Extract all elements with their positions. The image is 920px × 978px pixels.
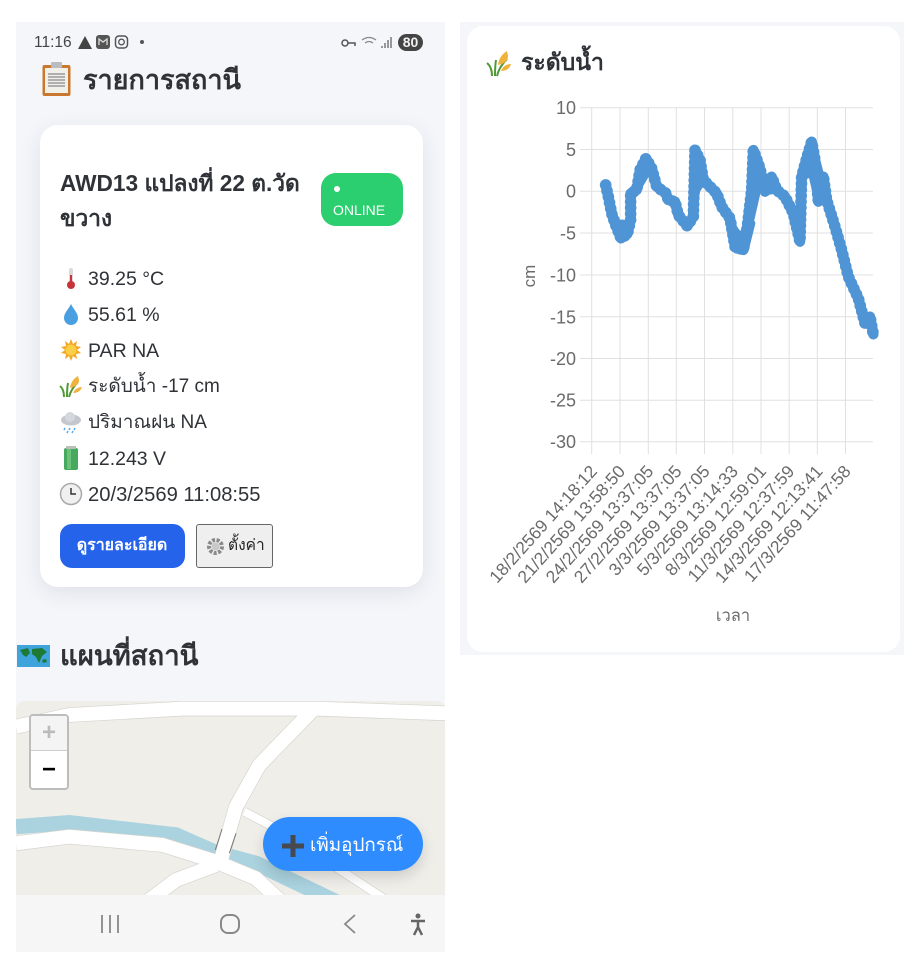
data series: [606, 142, 873, 334]
panel: phone screenshot: [16, 22, 445, 952]
y axis labels: 5: [566, 140, 576, 160]
settings label: ตั้งค่า: [228, 537, 265, 554]
button: details: ดูรายละเอียด: [77, 537, 167, 554]
reading: temperature: 39.25 °C: [88, 268, 164, 290]
badge dot: [334, 186, 340, 192]
add device button: [263, 817, 423, 871]
heading: water level: ระดับน้ำ: [521, 49, 604, 75]
x axis labels: 3/3/2569 13:37:05: [604, 461, 714, 580]
y axis labels: -30: [550, 432, 576, 452]
y axis labels: 10: [556, 98, 576, 118]
y axis labels: -25: [550, 390, 576, 410]
reading: PAR: PAR NA: [88, 340, 159, 362]
reading: water level: [60, 372, 220, 398]
line chart: [485, 98, 879, 625]
y axis labels: -15: [550, 308, 576, 328]
panel: station card: [40, 125, 423, 587]
x axis labels: 18/2/2569 14:18:12: [485, 461, 601, 587]
reading: timestamp: 20/3/2569 11:08:55: [88, 484, 260, 506]
status icons: [78, 34, 423, 51]
x axis labels: 5/3/2569 13:14:33: [633, 461, 742, 580]
status time: 11:16: [34, 34, 72, 51]
y axis labels: -5: [560, 224, 576, 244]
panel: water level chart: [460, 22, 904, 655]
x axis labels: 14/3/2569 12:13:41: [711, 461, 827, 587]
status badge: [321, 173, 403, 226]
y axis labels: [550, 98, 576, 452]
x axis labels: 11/3/2569 12:37:59: [683, 461, 798, 586]
icon: world map: [17, 645, 50, 667]
x axis labels: 27/2/2569 13:37:05: [570, 461, 686, 587]
icon: clipboard: [42, 62, 70, 96]
icon: plus: [282, 835, 304, 857]
map: [16, 701, 445, 895]
icon: rice: [486, 51, 511, 76]
y axis labels: -20: [550, 349, 576, 369]
heading: station map: แผนที่สถานี: [60, 640, 198, 671]
status bar: [34, 34, 423, 51]
navigation bar: [101, 914, 425, 936]
zoom in: [31, 716, 67, 751]
x axis labels: [485, 461, 855, 587]
y axis title: cm: [520, 265, 539, 287]
reading: voltage: 12.243 V: [88, 448, 166, 470]
x axis title: เวลา: [716, 607, 750, 625]
y axis labels: -10: [550, 266, 576, 286]
map zoom control: [29, 714, 69, 790]
station name: ขวาง: [60, 205, 112, 231]
reading: water level: ระดับน้ำ -17 cm: [88, 376, 220, 397]
x axis labels: 8/3/2569 12:59:01: [661, 461, 770, 580]
station name: AWD13 แปลงที่ 22 ต.วัด: [60, 170, 300, 196]
x axis labels: 21/2/2569 13:58:50: [513, 461, 629, 587]
reading: rainfall: ปริมาณฝน NA: [88, 412, 207, 433]
icon: gear: [207, 538, 224, 555]
x axis labels: 17/3/2569 11:47:58: [740, 461, 855, 586]
button: details: [60, 524, 184, 568]
button: settings: [196, 524, 273, 568]
reading: humidity: 55.61 %: [88, 304, 160, 326]
badge label: ONLINE: [333, 202, 385, 218]
chart card: [467, 26, 900, 652]
battery percent: 80: [403, 34, 418, 50]
heading: station list: รายการสถานี: [83, 65, 241, 95]
add device label: เพิ่มอุปกรณ์: [310, 834, 403, 855]
y axis labels: 0: [566, 182, 576, 202]
zoom in: +: [42, 719, 56, 746]
x axis labels: 24/2/2569 13:37:05: [542, 461, 657, 587]
zoom out: −: [42, 756, 56, 783]
reading: PAR: [61, 339, 159, 362]
station name: [60, 167, 300, 231]
